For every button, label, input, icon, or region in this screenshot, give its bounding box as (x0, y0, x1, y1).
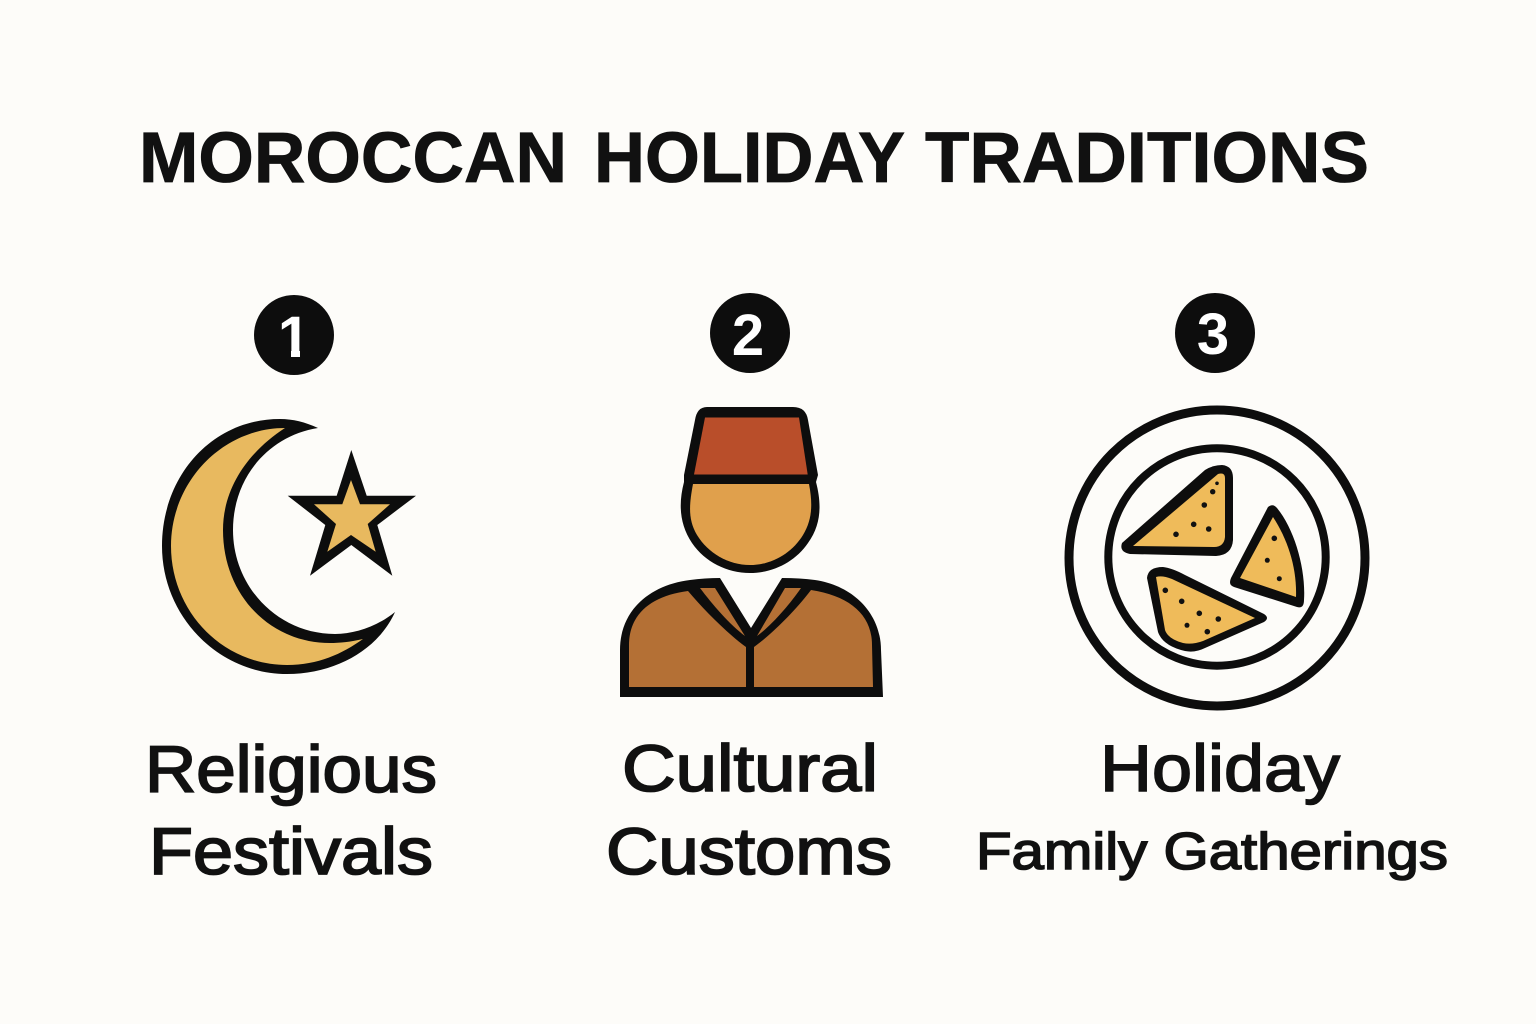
icon: flatbread triangle top (1121, 465, 1233, 556)
title: TRADITIONS (925, 119, 1369, 198)
number badge 1 (254, 295, 334, 375)
label: religious festivals: Religious (145, 732, 437, 806)
number badge 3: 3 (1197, 302, 1229, 367)
label: religious festivals (145, 732, 437, 888)
number badge 2 (710, 293, 790, 373)
icon: star (288, 450, 416, 576)
label: cultural customs: Cultural (622, 731, 878, 805)
icon: robe (620, 578, 883, 697)
icon: plate (1069, 410, 1365, 706)
title: MOROCCAN (139, 119, 567, 198)
title: HOLIDAY (594, 119, 905, 198)
number badge 3 (1175, 293, 1255, 373)
label: holiday family gatherings (976, 731, 1448, 881)
number badge 2: 2 (732, 303, 764, 368)
label: holiday family gatherings: Holiday (1100, 731, 1340, 805)
column 2: cultural customs (606, 293, 892, 888)
number badge 1: 1 (278, 305, 310, 370)
icon: flatbread triangle right (1230, 505, 1304, 607)
column 3: holiday family gatherings (976, 293, 1448, 881)
column 1: religious festivals (145, 295, 437, 888)
icon: fez hat (694, 418, 808, 474)
icon: flatbread triangle bottom (1147, 567, 1267, 652)
label: cultural customs (606, 731, 892, 888)
icon: face (690, 484, 811, 565)
label: religious festivals: Festivals (149, 814, 433, 888)
label: cultural customs: Customs (606, 814, 892, 888)
label: holiday family gatherings: Family Gatherings (976, 823, 1448, 881)
icon: crescent moon (162, 419, 395, 674)
icon: person head and fez outline (681, 407, 820, 573)
title (139, 119, 1369, 198)
